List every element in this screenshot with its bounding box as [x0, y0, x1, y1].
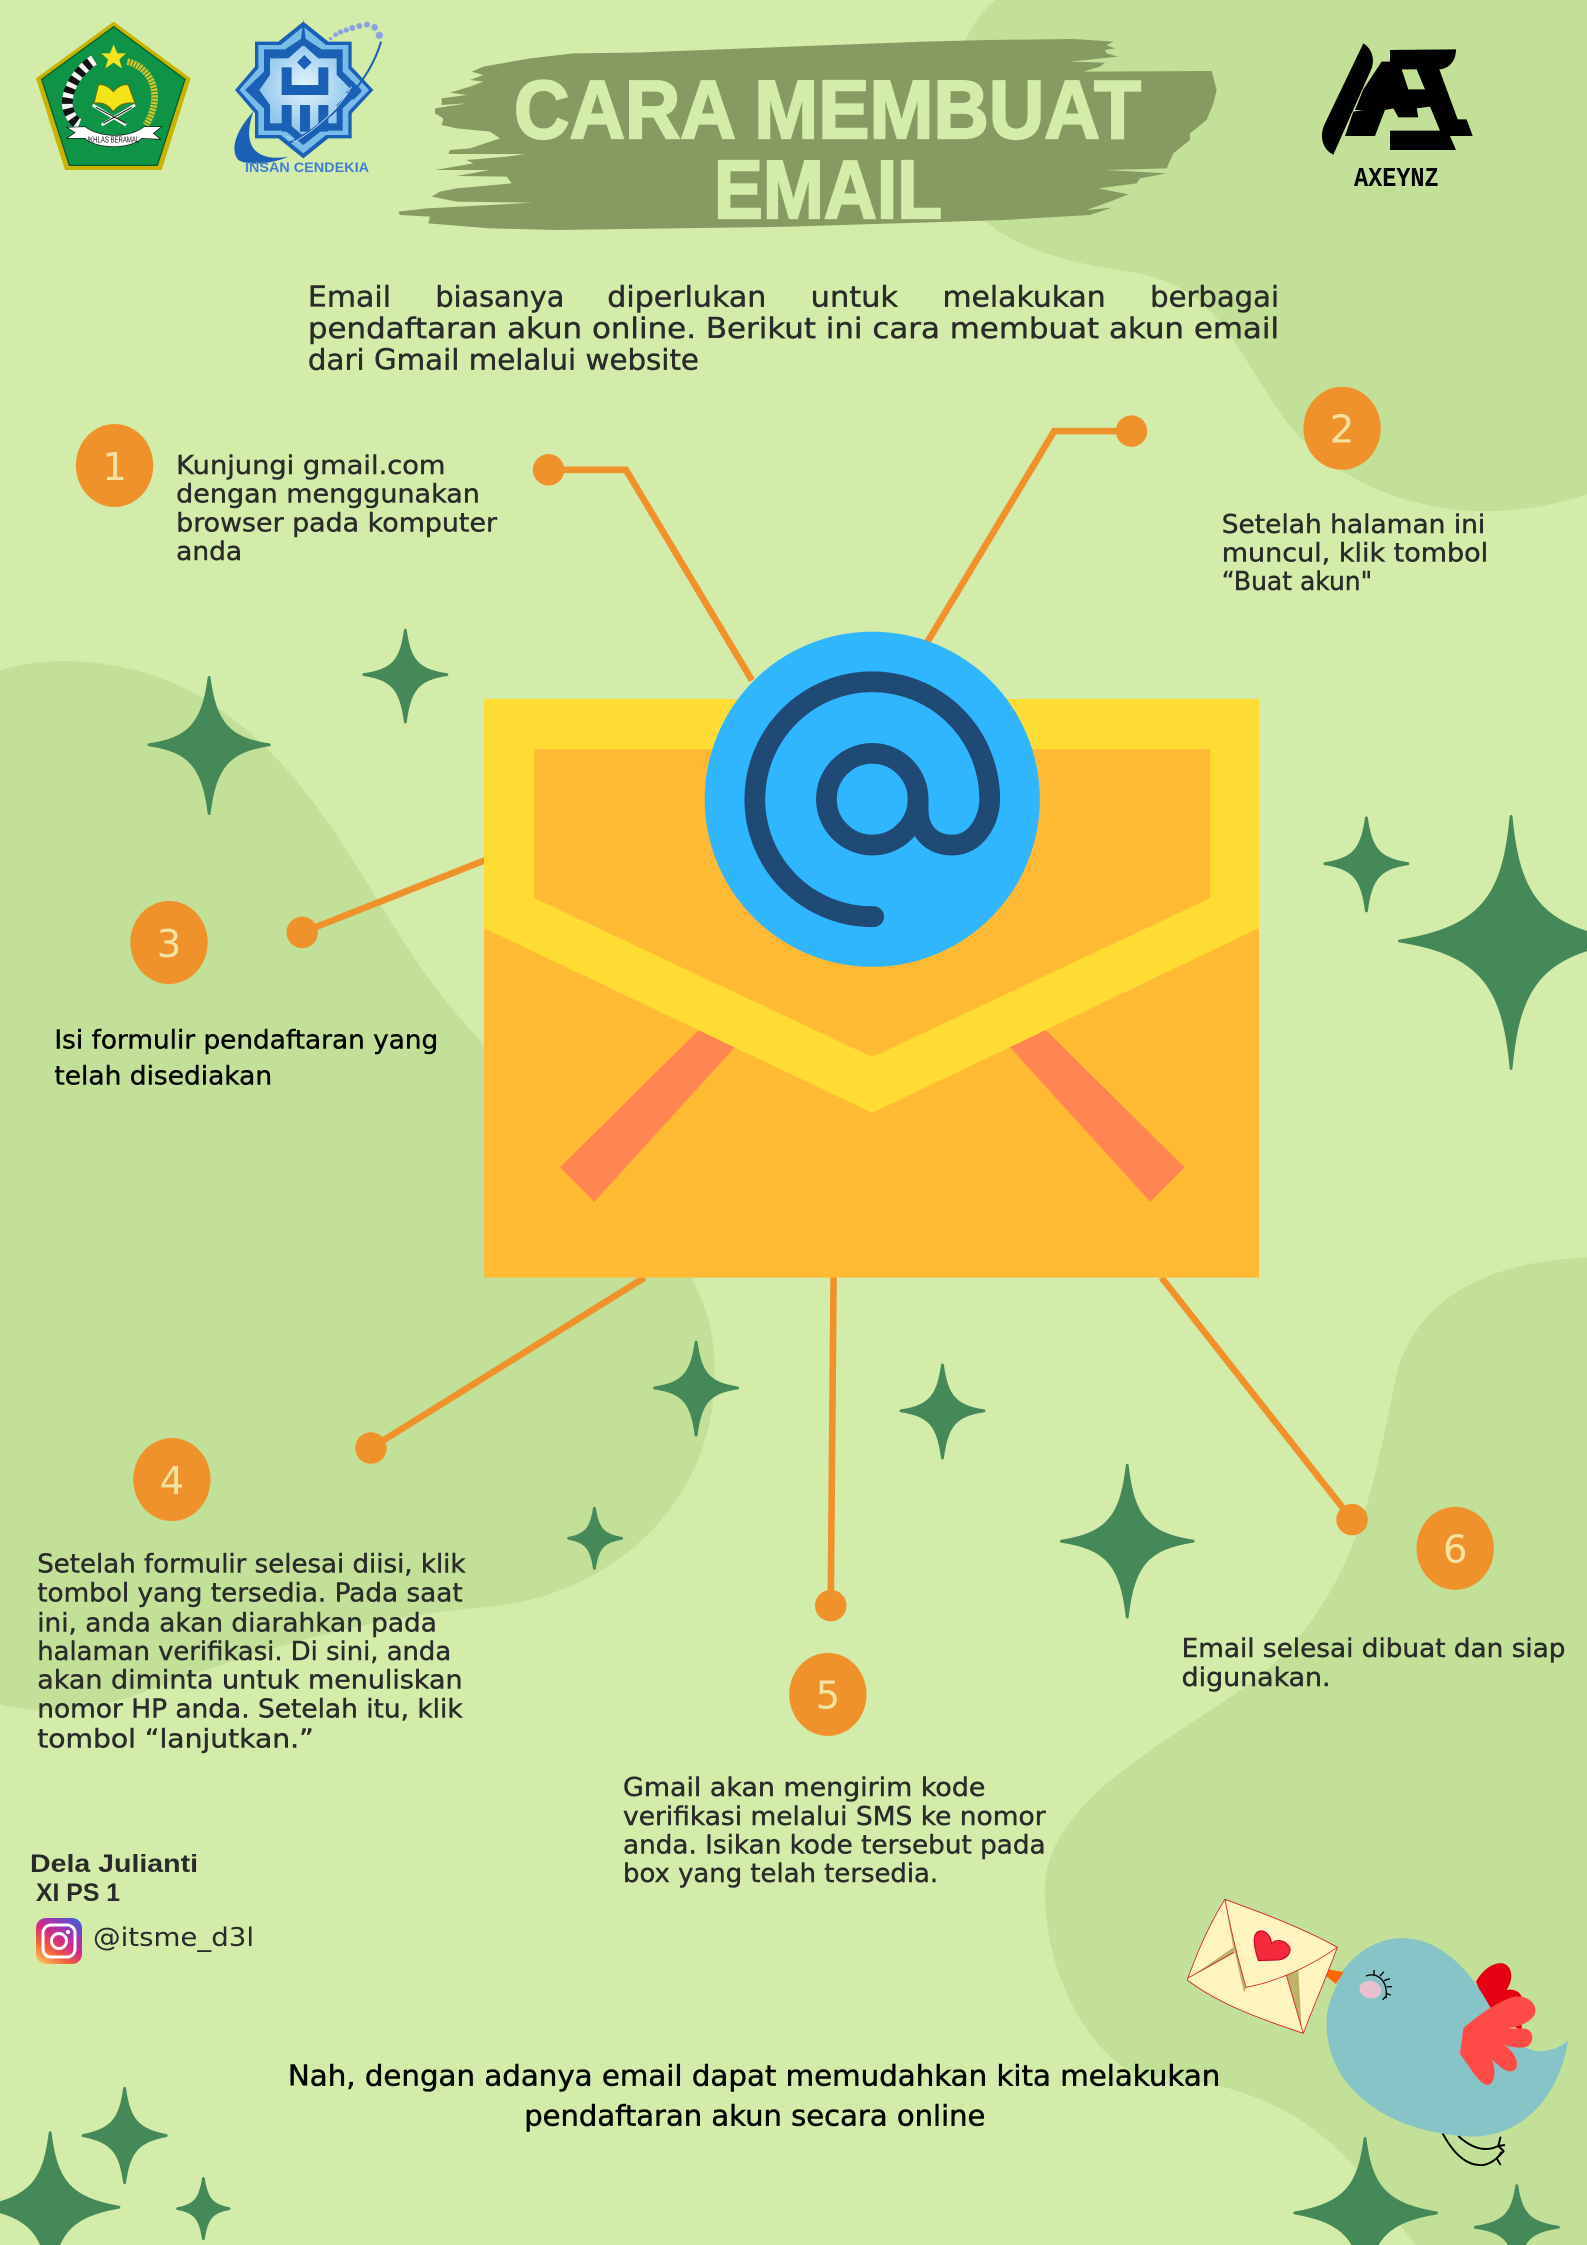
step 2: Setelah halaman ini: [1222, 510, 1485, 540]
connector lines and dots: [286, 415, 1368, 1621]
closing text: Nah, dengan adanya email dapat memudahkan kita melakukan: [288, 2058, 1220, 2092]
step 5: Gmail akan mengirim kode: [623, 1773, 985, 1803]
step 1: 1: [102, 445, 127, 490]
step 2: “Buat akun": [1222, 567, 1372, 597]
step 5: 5: [816, 1674, 840, 1719]
author credit: @itsme_d3l: [93, 1923, 254, 1953]
background blob: left: [0, 661, 715, 1710]
background blob: top right: [951, 0, 1587, 511]
logo: Axeynz: [1322, 43, 1473, 195]
letter envelope: [1187, 1899, 1337, 2033]
eye and cheek: [1358, 1970, 1392, 2000]
icon: large envelope with @ badge: [484, 632, 1259, 1278]
step 1: browser pada komputer: [176, 508, 497, 538]
step 3: telah disediakan: [54, 1061, 272, 1091]
step 6: [1182, 1507, 1566, 1693]
logo: Axeynz: AXEYNZ: [1354, 165, 1439, 195]
step 6: 6: [1443, 1528, 1468, 1573]
step 6: digunakan.: [1182, 1663, 1331, 1693]
heart: [1254, 1931, 1290, 1961]
illustration: bird carrying envelope: [1187, 1899, 1568, 2165]
intro text: dari Gmail melalui website: [308, 343, 699, 377]
bird body: [1327, 1938, 1568, 2137]
step 3: Isi formulir pendaftaran yang: [54, 1025, 438, 1055]
swoosh: [288, 42, 381, 143]
step 4: [37, 1438, 466, 1754]
step 3: 3: [157, 922, 181, 967]
back feathers: [1476, 1963, 1523, 2030]
open book: [94, 85, 135, 112]
step 4: 4: [160, 1459, 184, 1504]
title text: CARA MEMBUAT: [514, 63, 1141, 156]
intro text: melakukan: [942, 280, 1106, 314]
step 1: dengan menggunakan: [176, 480, 480, 510]
intro text: biasanya: [435, 280, 564, 314]
intro text: [308, 280, 1279, 377]
step 2: muncul, klik tombol: [1222, 538, 1488, 568]
author credit: Dela Julianti: [30, 1850, 198, 1878]
step 5: [623, 1653, 1046, 1889]
background blob: bottom right: [1045, 1258, 1587, 2245]
intro text: Email: [308, 280, 391, 314]
beads: [329, 22, 383, 40]
logo: Insan Cendekia: INSAN CENDEKIA: [245, 159, 369, 175]
logo: Insan Cendekia: [234, 19, 383, 175]
step 5: verifikasi melalui SMS ke nomor: [623, 1802, 1046, 1832]
title text: EMAIL: [714, 143, 942, 236]
step 1: [76, 424, 497, 567]
wing: [1460, 1996, 1535, 2085]
title text: [514, 63, 1141, 236]
step 2: 2: [1330, 408, 1354, 453]
ribbon: [67, 127, 162, 147]
bird legs: [1443, 2133, 1505, 2165]
logo: Kementerian Agama: IKHLAS BERAMAL: [87, 136, 140, 145]
brush stroke: [398, 39, 1217, 230]
closing text: pendaftaran akun secara online: [524, 2099, 985, 2133]
step 4: Setelah formulir selesai diisi, klik: [37, 1550, 466, 1580]
intro text: berbagai: [1150, 280, 1279, 314]
crossed stand: [93, 105, 135, 125]
author credit: XI PS 1: [36, 1879, 120, 1907]
intro text: pendaftaran akun online. Berikut ini cara membuat akun email: [308, 311, 1279, 345]
step 5: box yang telah tersedia.: [623, 1859, 938, 1889]
sparkle decorations: [0, 630, 1587, 2245]
step 3: [54, 901, 438, 1091]
beak: [1315, 1967, 1344, 1984]
step 6: Email selesai dibuat dan siap: [1182, 1634, 1566, 1664]
closing text: [288, 2058, 1220, 2133]
intro text: diperlukan: [607, 280, 766, 314]
step 4: tombol yang tersedia. Pada saat: [37, 1578, 463, 1608]
step 4: halaman verifikasi. Di sini, anda: [37, 1637, 451, 1667]
step 1: Kunjungi gmail.com: [176, 451, 445, 481]
step 1: anda: [176, 537, 242, 567]
step 4: nomor HP anda. Setelah itu, klik: [37, 1694, 463, 1724]
title banner: [398, 39, 1217, 236]
logo: Kementerian Agama: [36, 22, 191, 170]
author credit: [30, 1850, 254, 1964]
rice stalk: [127, 62, 155, 125]
step 4: akan diminta untuk menuliskan: [37, 1666, 463, 1696]
step 2: [1222, 387, 1488, 597]
step 4: ini, anda akan diarahkan pada: [37, 1608, 437, 1638]
intro text: untuk: [811, 280, 898, 314]
cotton: [67, 60, 94, 124]
step 5: anda. Isikan kode tersebut pada: [623, 1830, 1046, 1860]
icon: instagram: [36, 1918, 82, 1964]
step 4: tombol “lanjutkan.”: [37, 1724, 314, 1754]
